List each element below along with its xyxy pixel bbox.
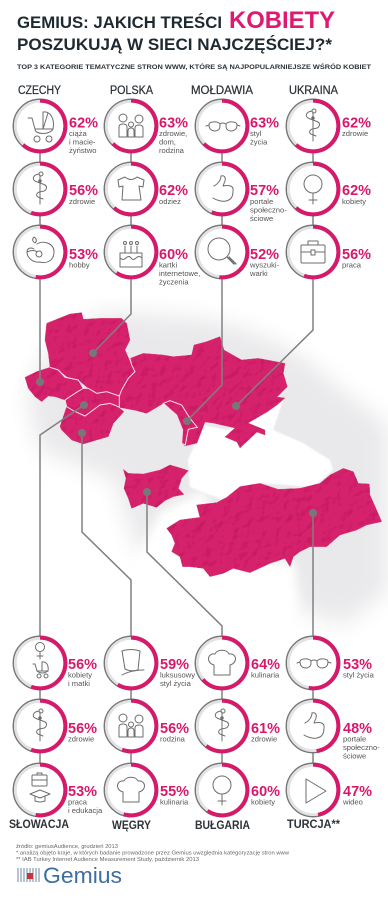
label: 57%: ściowe [250, 214, 273, 223]
label: 59%: luksusowy [160, 670, 195, 680]
subtitle: TOP 3 KATEGORIE TEMATYCZNE STRON WWW, KTÓRE SĄ NAJPOPULARNIEJSZE WŚRÓD KOBIET [17, 62, 372, 71]
title: POSZUKUJĄ W SIECI NAJCZĘŚCIEJ?* [17, 35, 332, 54]
ring: kobiety 62% [286, 162, 340, 216]
label: 64%: 64% [251, 657, 280, 673]
label: 47%: wideo [342, 798, 363, 806]
label: 63%: życia [250, 138, 268, 146]
label: 56%: 56% [68, 657, 97, 673]
ring: kobiety i matki 56% [13, 636, 67, 690]
Bulgaria [123, 465, 188, 508]
label: 56%: praca [342, 260, 362, 270]
map: white borders [50, 358, 197, 445]
country labels top: POLSKA [110, 85, 153, 97]
panel: Ukraina [286, 99, 371, 279]
label: 60%: 60% [251, 784, 280, 800]
label: 62%: odzież [159, 197, 181, 206]
label: 56%: zdrowie [69, 197, 95, 206]
label: 63%: 63% [159, 116, 188, 132]
label: 53%: styl życia [343, 670, 375, 680]
title [17, 7, 335, 54]
label: 52%: wyszuki- [249, 260, 280, 270]
label: 62% [159, 183, 188, 206]
ring: kobiety 60% [195, 763, 249, 817]
Poland [45, 313, 135, 396]
Hungary [60, 403, 124, 444]
map: pink countries [25, 313, 382, 577]
label: 62%: 62% [342, 183, 371, 199]
ring: praca i edukacja 53% [13, 763, 67, 817]
country labels top: UKRAINA [289, 85, 338, 97]
country labels bottom: BUŁGARIA [195, 820, 250, 832]
label: 63% [159, 116, 188, 155]
title: GEMIUS: JAKICH TREŚCI [17, 13, 222, 32]
ring: kartki 60% [104, 225, 158, 279]
Turkey [167, 468, 382, 577]
ring: ciąża 62% [13, 99, 67, 153]
label: 62%: zdrowie [342, 129, 368, 138]
panel: Słowacja [13, 636, 103, 817]
ring: portale 57% [195, 162, 249, 216]
map: Central and Eastern Europe [25, 313, 287, 448]
label: 52%: warki [249, 269, 268, 278]
footnotes [16, 844, 289, 863]
label: 62%: 62% [159, 183, 188, 199]
ring: styl życia 63% [195, 99, 249, 153]
label: 60%: kartki [159, 260, 177, 270]
label: 63%: zdrowie, [159, 129, 187, 138]
ring: rodzina 56% [104, 699, 158, 753]
label: 62%: ciąża [69, 129, 88, 138]
label: 59% [160, 657, 195, 688]
ring: praca 56% [286, 225, 340, 279]
label: 53%: 53% [69, 247, 98, 263]
label: 62%: 62% [342, 116, 371, 132]
logo mark [17, 868, 40, 882]
ring: luksusowy styl życia 59% [104, 636, 158, 690]
country labels bottom: TURCJA** [287, 819, 340, 831]
label: 52%: 52% [250, 247, 279, 263]
label: 63% [250, 116, 279, 146]
label: 52% [249, 247, 280, 278]
panel: Polska [104, 99, 200, 286]
label: 53%: 53% [68, 784, 97, 800]
label: 56%: 56% [160, 721, 189, 737]
footnotes: ** IAB Turkey Internet Audience Measurement Study, październik 2013 [16, 857, 199, 863]
label: 63%: dom, [159, 138, 176, 146]
label: 64%: kulinaria [251, 670, 280, 680]
label: 56%: rodzina [160, 734, 186, 744]
Moldova [163, 401, 197, 445]
label: 63%: styl [250, 129, 262, 138]
aegean sea [115, 490, 240, 660]
panel: Mołdawia [195, 99, 287, 279]
label: 59%: 59% [160, 657, 189, 673]
label: 59%: styl życia [160, 679, 192, 688]
label: 62%: żyństwo [69, 146, 96, 155]
country labels top: MOŁDAWIA [191, 85, 253, 97]
label: 62% [69, 116, 98, 155]
ring: zdrowie 62% [286, 99, 340, 153]
ring: odzież 62% [104, 162, 158, 216]
panel: Bułgaria [195, 636, 280, 817]
ring: styl życia 53% [286, 636, 340, 690]
Ukraine [119, 337, 287, 448]
label: 48%: 48% [343, 721, 372, 737]
label: 63%: rodzina [159, 146, 185, 155]
label: 56%: 56% [342, 247, 371, 263]
ring: kulinaria 64% [195, 636, 249, 690]
ring: portale 48% [286, 699, 340, 753]
label: 48% [343, 721, 380, 760]
label: 61%: zdrowie [251, 734, 277, 744]
panel: Węgry [104, 636, 195, 817]
label: 62%: kobiety [342, 197, 366, 206]
panel: Czechy [13, 99, 98, 279]
map background relief [28, 312, 388, 660]
Czech Republic [25, 367, 83, 402]
country labels bottom [9, 819, 340, 832]
label: 48%: ściowe [343, 752, 366, 760]
label: 62% [342, 183, 371, 206]
footnotes: źródło: gemiusAudience, grudzień 2013 [16, 844, 118, 850]
label: 56%: 56% [69, 183, 98, 199]
label: 60%: 60% [159, 247, 188, 263]
label: 56% [69, 183, 98, 206]
ring: zdrowie 61% [195, 699, 249, 753]
label: 56%: zdrowie [68, 734, 94, 744]
label: 56% [68, 657, 97, 688]
label: 48%: społeczno- [343, 743, 380, 752]
label: 60%: kobiety [251, 798, 275, 806]
label: 62%: 62% [69, 116, 98, 132]
mediterranean sea [175, 562, 298, 660]
country labels bottom: SŁOWACJA [9, 819, 69, 831]
ring: zdrowie 56% [13, 162, 67, 216]
ring: zdrowie 56% [13, 699, 67, 753]
label: 57% [250, 183, 287, 223]
label: 48%: portale [343, 734, 366, 744]
label: 53% [343, 657, 375, 680]
label: 57%: 57% [250, 183, 279, 199]
Slovakia [65, 388, 119, 416]
connector lines [40, 126, 313, 790]
map: Bulgaria and Turkey [123, 465, 382, 577]
country labels bottom: WĘGRY [112, 820, 151, 832]
label: 55%: kulinaria [160, 798, 189, 806]
title: KOBIETY [229, 7, 335, 34]
label: 56%: i matki [68, 679, 90, 688]
label: 53%: hobby [69, 260, 90, 270]
panel: Turcja [286, 636, 380, 817]
country labels top [18, 85, 338, 97]
black sea [188, 400, 333, 500]
label: 56%: kobiety [68, 670, 92, 680]
label: 53%: i edukacja [68, 806, 103, 815]
label: 62%: i macie- [69, 138, 96, 146]
label: 53%: praca [68, 798, 88, 806]
label: 63%: 63% [250, 116, 279, 132]
ring: hobby 53% [13, 225, 67, 279]
label: 56%: 56% [68, 721, 97, 737]
label: 61%: 61% [251, 721, 280, 737]
label: 57%: portale [250, 197, 273, 206]
label: 53%: 53% [343, 657, 372, 673]
label: 60%: życzenia [159, 278, 189, 286]
footnotes: * analizą objęto kraje, w których badanie prowadzone przez Gemius uwzględnia kategoryzację stron www [16, 850, 289, 856]
ring: zdrowie, dom, rodzina 63% [104, 99, 158, 153]
label: 47% [342, 784, 372, 806]
label: 55%: 55% [160, 784, 189, 800]
label: 60% [159, 247, 200, 286]
label: 57%: społeczno- [250, 206, 287, 214]
ring: kulinaria 55% [104, 763, 158, 817]
ring: wideo 47% [286, 763, 340, 817]
label: 53% [68, 784, 103, 815]
logo: Gemius: Gemius [43, 863, 122, 888]
ring: wyszukiwarki 52% [195, 225, 249, 279]
country labels top: CZECHY [18, 85, 61, 97]
label: 47%: 47% [343, 784, 372, 800]
label: 60%: internetowe, [159, 269, 200, 278]
map location dots [36, 349, 317, 517]
